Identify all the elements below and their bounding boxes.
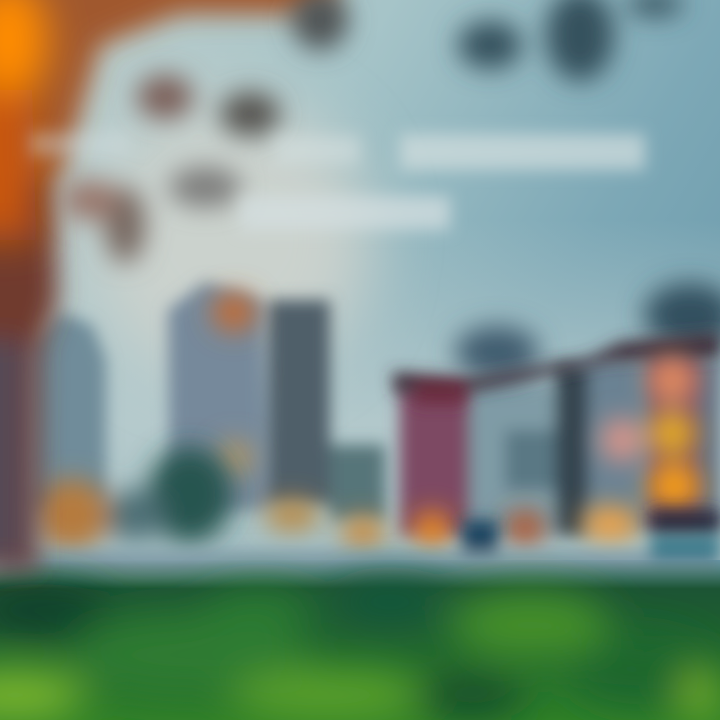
sun glow through the tree — [0, 0, 48, 240]
towers — [30, 282, 385, 520]
lit windows and street lights — [212, 292, 700, 549]
leaf clusters — [62, 0, 348, 263]
tree trunk and branches — [0, 0, 345, 570]
dark base of buildings — [0, 510, 720, 574]
pale haze behind the tree — [90, 100, 370, 380]
building roofs — [455, 283, 720, 378]
mid trees in front of towers — [36, 447, 232, 551]
foliage top right — [458, 0, 683, 81]
shrub highlights — [0, 580, 720, 720]
building bodies — [400, 350, 720, 535]
green shrubs foreground — [0, 560, 720, 720]
title: blurred and unreadable, shown as soft light bars — [30, 132, 645, 230]
roof line — [392, 332, 720, 404]
